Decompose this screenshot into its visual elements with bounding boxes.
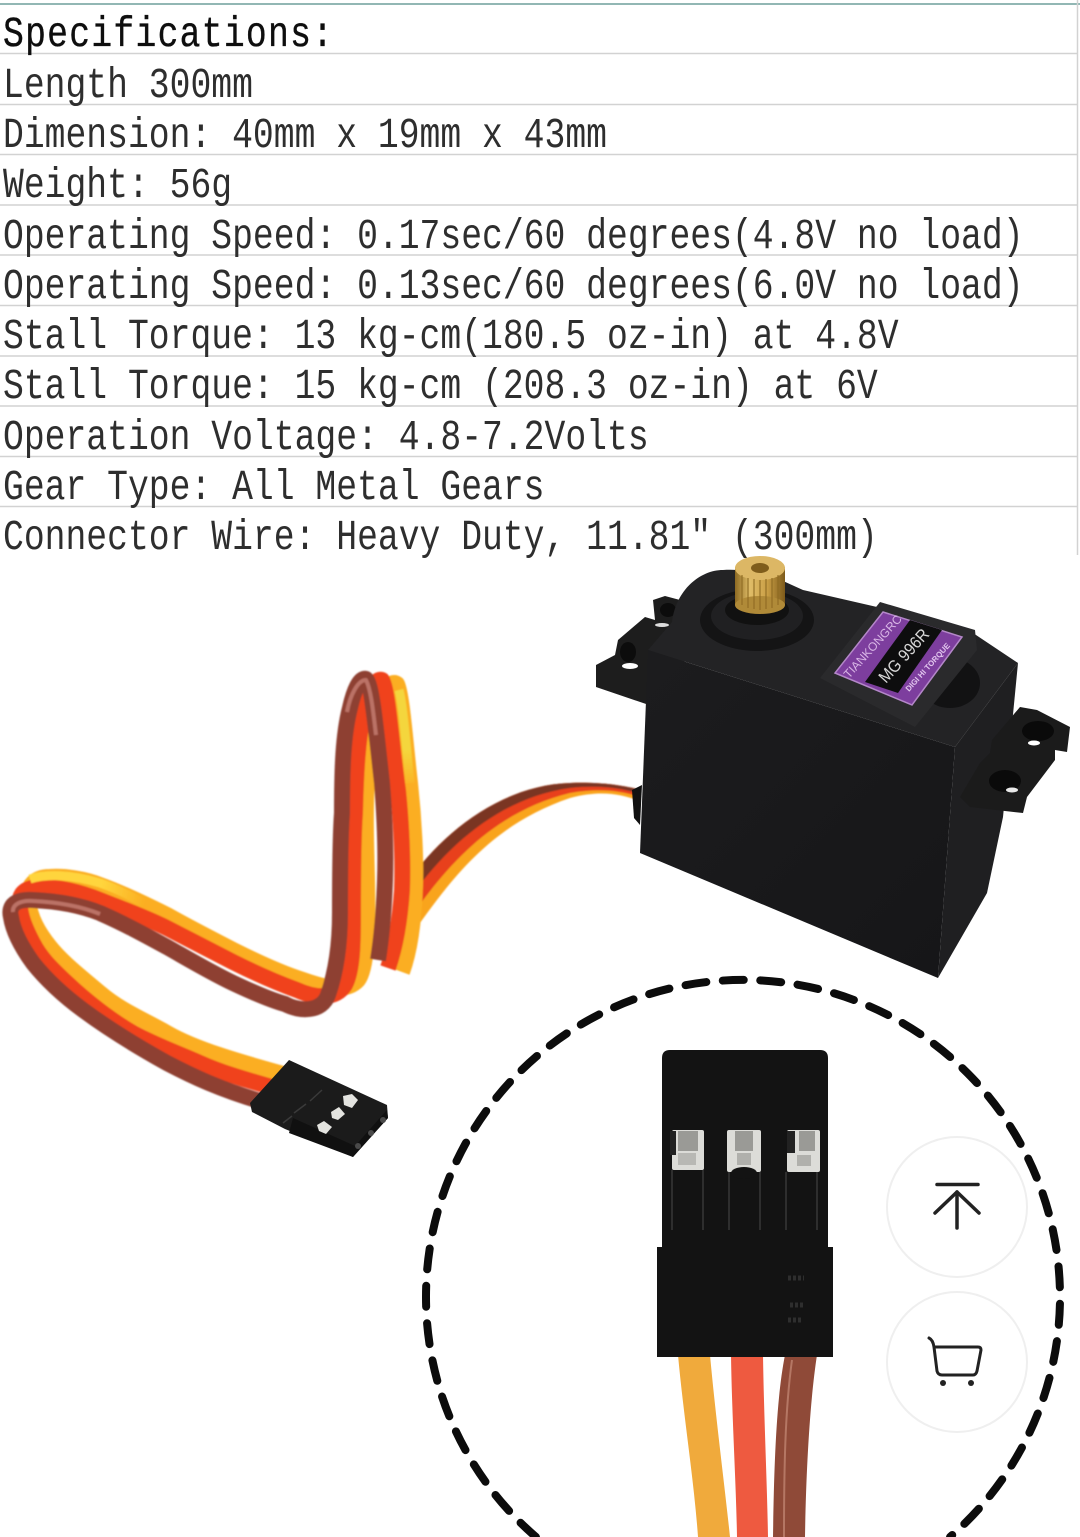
metal contacts (670, 1130, 820, 1179)
spec: gear type: Gear Type: All Metal Gears (3, 463, 545, 512)
right mounting ears (960, 707, 1070, 813)
icon: up arrow (935, 1184, 979, 1228)
spec: dimension: Dimension: 40mm x 19mm x 43mm (3, 111, 607, 160)
cart button (887, 1292, 1027, 1432)
label plate (820, 602, 977, 727)
spec: connector wire: Connector Wire: Heavy Duty, 11.81″ (300mm) (3, 513, 878, 562)
left mounting ears (596, 596, 700, 706)
back to top button (887, 1137, 1027, 1277)
purple label (835, 612, 962, 705)
dashed detail circle (426, 980, 1060, 1537)
torque text: DIGI HI TORQUE (904, 641, 952, 693)
disc behind label (920, 658, 980, 708)
specifications table (0, 0, 1080, 562)
spec: length: Length 300mm (3, 61, 253, 110)
servo top (648, 570, 1018, 747)
table heading: Specifications: (3, 10, 333, 59)
spec: stall torque at 4.8V: Stall Torque: 13 kg-cm(180.5 oz-in) at 4.8V (3, 312, 899, 361)
spec: operation voltage: Operation Voltage: 4.8-7.2Volts (3, 413, 649, 462)
servo motor (596, 556, 1070, 978)
brass output gear (735, 556, 785, 614)
servo right side (938, 663, 1018, 978)
wire grommet (632, 785, 642, 825)
icon: shopping cart (929, 1338, 981, 1386)
spec: weight: Weight: 56g (3, 161, 232, 210)
output shaft collar (700, 589, 814, 651)
red wire (731, 1355, 768, 1537)
brand text: TIANKONGRC (841, 612, 905, 681)
enlarged connector housing (657, 1050, 833, 1357)
brown wire (773, 1355, 817, 1537)
yellow wire (678, 1355, 730, 1537)
spec: operating speed at 4.8V: Operating Speed: 0.17sec/60 degrees(4.8V no load) (3, 212, 1024, 261)
model text: MG 996R (875, 625, 933, 687)
spec: stall torque at 6V: Stall Torque: 15 kg-cm (208.3 oz-in) at 6V (3, 362, 878, 411)
servo lead wire (10, 679, 637, 1104)
enlarged connector wires (678, 1355, 817, 1537)
spec: operating speed at 6.0V: Operating Speed: 0.13sec/60 degrees(6.0V no load) (3, 262, 1024, 311)
small wire connector (250, 1060, 388, 1157)
servo front face (640, 650, 955, 978)
